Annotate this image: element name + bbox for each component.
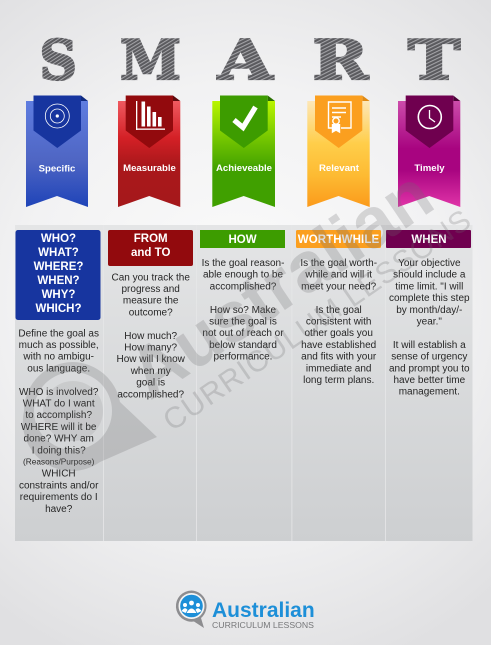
column: Measurable questions — [108, 230, 193, 400]
heading: WORTHWHILE — [296, 230, 381, 248]
title: SMART hatched letters — [40, 28, 460, 92]
text: Timely description — [389, 258, 470, 398]
text: Timely description: It will establish a — [393, 340, 466, 351]
text: Measurable description: How much? — [124, 331, 178, 342]
column: Timely questions — [386, 230, 471, 398]
text: Timely description: time limit. "I will — [395, 281, 463, 292]
watermark: Australian Curriculum Lessons: Australian — [115, 155, 447, 414]
text: Measurable description: Can you track the — [112, 272, 190, 283]
title: SMART hatched letters: R — [312, 29, 369, 92]
wordmark: Australian — [212, 599, 315, 622]
ribbon: Timely — [398, 96, 460, 207]
icon: clock — [418, 106, 441, 128]
column: Relevant questions — [296, 230, 381, 386]
text: Relevant description: while and will it — [304, 270, 372, 281]
text: Specific description: WHERE will it be — [21, 422, 97, 433]
text: Specific description: much as possible, — [19, 340, 99, 351]
text: Relevant description: Is the goal worth- — [300, 258, 377, 269]
text: Timely description: management. — [399, 387, 460, 398]
text: Relevant description: consistent with — [306, 316, 371, 328]
title: SMART hatched letters: A — [217, 28, 274, 92]
text: Specific description: Define the goal as — [18, 328, 99, 339]
text: Achieveable description: below standard — [209, 340, 277, 351]
text: Measurable description: accomplished? — [117, 389, 184, 400]
logo: Australian Curriculum Lessons — [176, 590, 315, 630]
text: Measurable description: How will I know — [117, 354, 186, 365]
text: Specific description: constraints and/or — [19, 480, 99, 491]
heading: WHO WHAT WHERE: WHY? — [42, 289, 75, 301]
text: Timely description: year." — [417, 316, 442, 328]
icon: check mark — [234, 107, 256, 128]
text: Specific description: have? — [45, 504, 73, 515]
text: Specific description: WHICH — [42, 469, 76, 480]
text: Timely description: sense of urgency — [391, 352, 467, 363]
text: Achieveable description: performance. — [214, 352, 272, 363]
text: Specific description: to accomplish? — [25, 410, 92, 421]
heading: WHO WHAT WHERE: WHAT? — [38, 247, 79, 259]
title: SMART hatched letters: S — [40, 29, 77, 92]
text: Measurable description — [112, 272, 190, 400]
label: Measurable: Measurable — [123, 163, 176, 174]
text: Relevant description: immediate and — [306, 363, 371, 374]
text: Measurable description: when my — [130, 366, 171, 377]
text: Specific description: WHO is involved? — [19, 387, 99, 398]
text: Achieveable description — [202, 258, 284, 363]
title: SMART hatched letters: T — [408, 28, 460, 92]
heading: FROM and TO: FROM — [134, 233, 168, 245]
watermark: Australian Curriculum Lessons: CURRICULUM LESSONS — [157, 203, 478, 438]
label: Specific: Specific — [39, 164, 76, 174]
ribbon: Achieveable — [212, 96, 275, 207]
text: Relevant description: have established — [301, 340, 376, 351]
label: Achieveable: Achieveable — [216, 163, 272, 174]
label: Relevant: Relevant — [319, 163, 360, 174]
text: Relevant description: long term plans. — [303, 375, 374, 386]
text: Timely description: should include a — [393, 270, 466, 281]
heading: FROM and TO — [108, 230, 193, 266]
text: Timely description: by month/day/- — [396, 305, 462, 316]
text: Measurable description: goal is — [136, 378, 165, 389]
label: Timely: Timely — [414, 163, 445, 174]
tagline: CURRICULUM LESSONS — [212, 620, 314, 630]
text: Relevant description — [300, 258, 377, 386]
heading: HOW: HOW — [228, 234, 257, 246]
text: Relevant description: other goals you — [305, 328, 373, 339]
text: Timely description: have better time — [393, 375, 466, 386]
text: Relevant description: and fits with your — [301, 352, 377, 363]
column: Specific questions — [16, 230, 100, 515]
heading: FROM and TO: and TO — [131, 247, 170, 259]
text: Timely description: and prompt you to — [389, 363, 470, 374]
heading: WHEN: WHEN — [411, 234, 447, 246]
text: Relevant description: Is the goal — [316, 305, 362, 316]
column: Achieveable questions — [200, 230, 285, 363]
heading: WHEN — [386, 230, 471, 248]
text: Achieveable description: Is the goal reason- — [202, 258, 284, 269]
text: Achieveable description: able enough to be — [203, 270, 283, 281]
icon: speech pin with people — [176, 590, 207, 628]
text: Achieveable description: not out of reach or — [202, 328, 284, 339]
text: Timely description: complete this step — [389, 293, 470, 304]
text: Timely description: Your objective — [398, 258, 461, 269]
title: SMART hatched letters: M — [120, 29, 181, 92]
text: Measurable description: How many? — [124, 342, 178, 354]
heading: WHO WHAT WHERE: WHICH? — [36, 303, 82, 315]
text: Specific description: I doing this? — [32, 445, 86, 456]
text: Measurable description: measure the — [123, 296, 179, 307]
text: Specific description: requirements do I — [20, 492, 98, 503]
heading: WHO WHAT WHERE: WHEN? — [37, 275, 80, 287]
text: Specific description — [18, 328, 99, 515]
text: Achieveable description: How so? Make — [210, 305, 277, 316]
ribbon: Relevant — [307, 96, 370, 207]
panel: five-column table — [15, 225, 472, 541]
watermark: Australian Curriculum Lessons — [23, 155, 478, 471]
text: Measurable description: progress and — [122, 284, 180, 295]
icon: target — [45, 104, 69, 128]
text: Specific description: (Reasons/Purpose) — [23, 456, 95, 466]
text: Specific description: WHAT do I want — [23, 398, 95, 410]
heading: WHO WHAT WHERE: WHO? — [41, 233, 76, 245]
icon: certificate — [328, 102, 351, 132]
text: Relevant description: meet your need? — [301, 281, 377, 292]
ribbon: Measurable — [118, 96, 180, 207]
text: Measurable description: outcome? — [129, 307, 173, 318]
ribbon: Specific — [26, 96, 88, 207]
text: Specific description: ous language. — [27, 363, 90, 374]
text: Achieveable description: sure the goal is — [209, 316, 277, 328]
text: Specific description: with no ambigu- — [22, 352, 94, 363]
heading: WHO WHAT WHERE: WHERE? — [34, 261, 83, 273]
text: Achieveable description: accomplished? — [210, 281, 277, 292]
icon: bar chart — [136, 101, 165, 130]
heading: WORTHWHILE: WORTHWHILE — [298, 234, 379, 246]
heading: WHO WHAT WHERE — [16, 230, 100, 320]
text: Specific description: done? WHY am — [23, 434, 94, 445]
